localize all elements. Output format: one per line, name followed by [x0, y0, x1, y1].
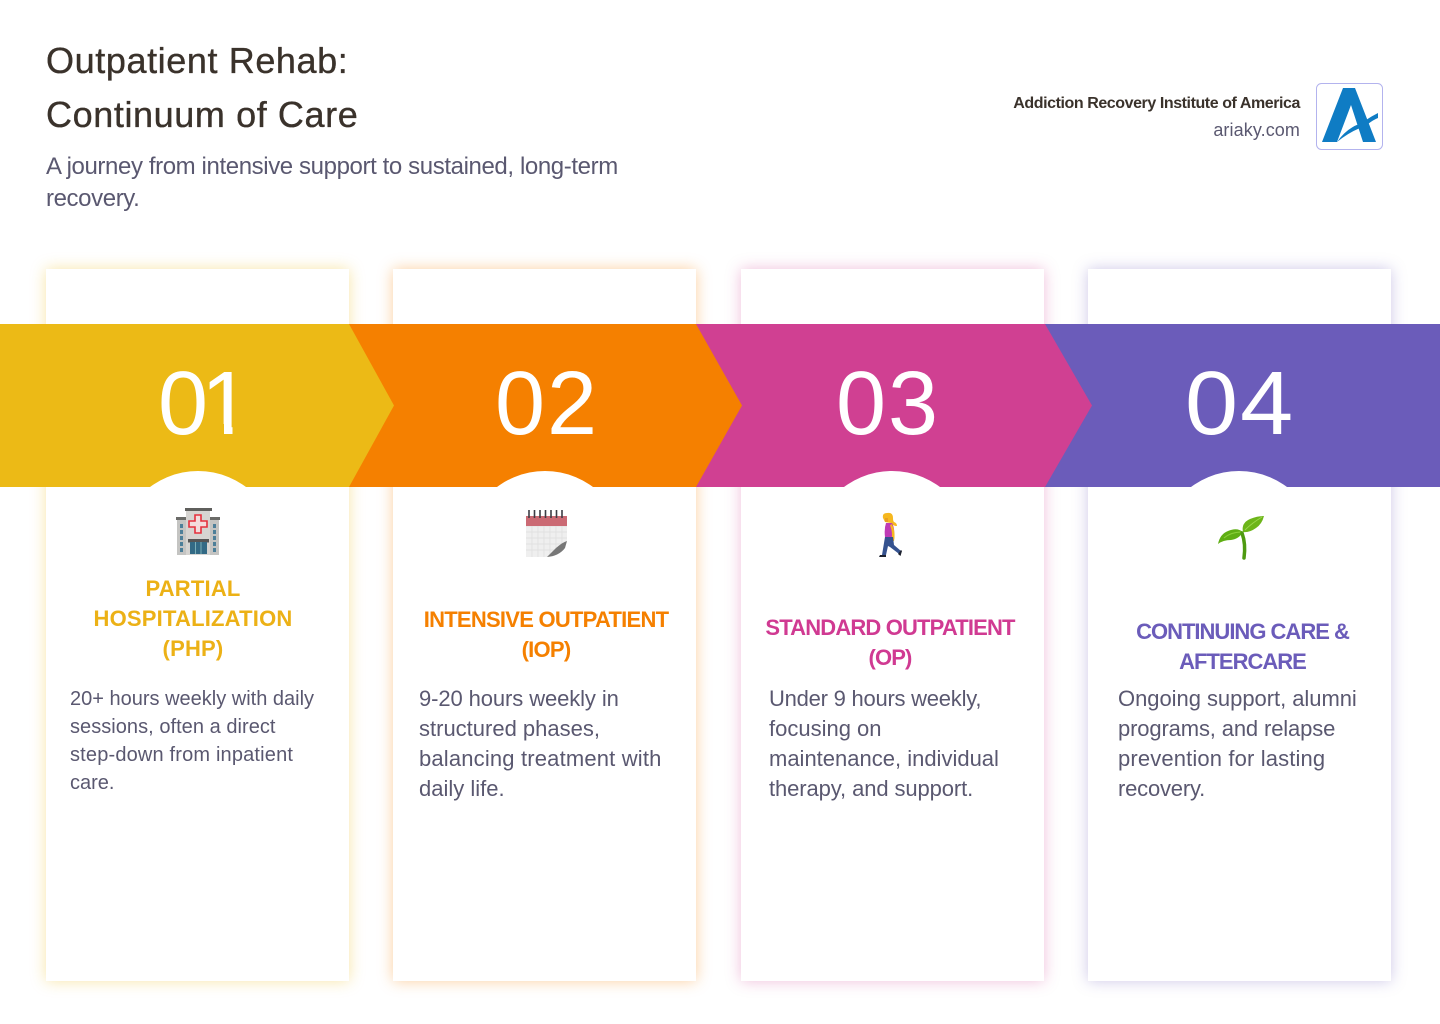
card 3 text: focusing on — [769, 716, 882, 741]
card 1 heading: HOSPITALIZATION — [94, 606, 292, 631]
card 3 text — [769, 686, 999, 801]
organization website: ariaky.com — [1213, 120, 1300, 140]
icon circle tops — [118, 471, 1319, 631]
number 01: 0 — [158, 354, 208, 454]
card 1 text: sessions, often a direct — [70, 716, 276, 738]
number 03: 03 — [836, 354, 940, 454]
card 4 heading — [1136, 619, 1350, 674]
card 2 background — [393, 269, 696, 981]
card 4 background — [1088, 269, 1391, 981]
card 1 text — [70, 688, 314, 794]
chevron band with step numbers — [0, 324, 1440, 487]
card 3 background — [741, 269, 1044, 981]
icon: seedling — [1218, 516, 1264, 560]
card 1 text: 20+ hours weekly with daily — [70, 688, 314, 710]
card 3 text: Under 9 hours weekly, — [769, 686, 981, 711]
card 1 heading: (PHP) — [163, 636, 223, 661]
card 2 text — [419, 686, 662, 801]
card 3 heading: (OP) — [868, 645, 912, 670]
card 4 text: recovery. — [1118, 776, 1205, 801]
card 2 heading: (IOP) — [522, 637, 570, 662]
card 4 text: Ongoing support, alumni — [1118, 686, 1357, 711]
card 2 text: balancing treatment with — [419, 746, 662, 771]
number 02: 02 — [495, 354, 599, 454]
title — [46, 40, 358, 135]
icon: person walking — [879, 512, 902, 557]
card 1 heading — [94, 576, 292, 661]
chevron 4 — [1040, 324, 1440, 487]
chevron 2 — [340, 324, 742, 487]
chevron 3 — [690, 324, 1092, 487]
card 1 text: step-down from inpatient — [70, 744, 293, 766]
subtitle — [46, 153, 618, 212]
card 4 text: prevention for lasting — [1118, 746, 1325, 771]
icon: hospital — [176, 508, 220, 555]
card 2 heading — [424, 607, 669, 662]
card 3 heading: STANDARD OUTPATIENT — [765, 615, 1015, 640]
card 4 heading: AFTERCARE — [1179, 649, 1306, 674]
card 3 heading — [765, 615, 1016, 670]
card 3 text: maintenance, individual — [769, 746, 999, 771]
card 2 text: structured phases, — [419, 716, 600, 741]
card 1 heading: PARTIAL — [145, 576, 241, 601]
card 4 text: programs, and relapse — [1118, 716, 1335, 741]
subtitle: A journey from intensive support to sustained, long-term — [46, 153, 618, 180]
subtitle: recovery. — [46, 185, 139, 212]
card 1 background — [46, 269, 349, 981]
title: Outpatient Rehab: — [46, 40, 348, 81]
organization name: Addiction Recovery Institute of America — [1013, 95, 1300, 112]
chevron 1 — [0, 324, 394, 487]
icon: calendar — [526, 510, 567, 557]
card 4 text — [1118, 686, 1357, 801]
card 2 text: daily life. — [419, 776, 505, 801]
title: Continuum of Care — [46, 94, 358, 135]
card 2 heading: INTENSIVE OUTPATIENT — [424, 607, 668, 632]
number 04: 04 — [1185, 352, 1295, 453]
card 1 text: care. — [70, 772, 114, 794]
number 01: 1 — [201, 354, 251, 454]
card 4 heading: CONTINUING CARE & — [1136, 619, 1349, 644]
card 2 text: 9-20 hours weekly in — [419, 686, 619, 711]
logo — [1316, 83, 1383, 150]
card 3 text: therapy, and support. — [769, 776, 973, 801]
